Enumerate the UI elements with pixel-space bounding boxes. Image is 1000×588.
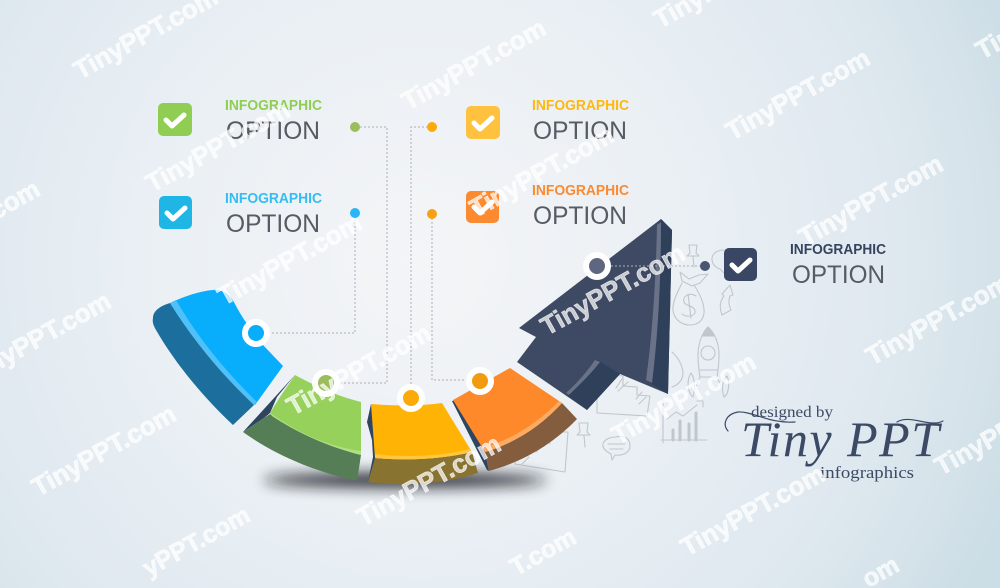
label: option: OPTION <box>226 210 320 238</box>
arrow shaft shade <box>567 360 620 410</box>
yellow dark edge <box>367 404 376 482</box>
designed by: designed by <box>751 404 833 421</box>
option: orange <box>466 183 630 230</box>
doodle: stairs bottom <box>515 432 568 472</box>
watermark: TinyPPT.com <box>140 94 295 198</box>
option: yellow <box>466 98 630 145</box>
dot: blue <box>350 208 360 218</box>
segment: blue <box>153 290 283 425</box>
label: option: OPTION <box>226 117 320 145</box>
connector: yellow <box>411 127 428 386</box>
green side face <box>243 414 361 481</box>
watermark: TinyPPT.com <box>212 207 367 311</box>
watermark: TinyPPT.com <box>281 317 436 421</box>
watermark: TinyPPT.com <box>720 42 875 146</box>
yellow highlight strip <box>375 449 472 459</box>
watermark: TinyPPT.com <box>675 458 830 562</box>
watermark partial: yPPT.com <box>138 501 255 583</box>
dot: orange <box>427 209 437 219</box>
dot: green <box>350 122 360 132</box>
dot: yellow <box>427 122 437 132</box>
infographics: infographics <box>820 463 914 482</box>
label: option: OPTION <box>533 202 627 230</box>
ring: blue <box>245 322 267 344</box>
segment: green <box>243 375 361 481</box>
icon: blue check <box>159 196 192 229</box>
green highlight strip <box>270 413 361 455</box>
connector: navy <box>607 265 700 267</box>
doodle: money bag <box>673 272 708 325</box>
connector: blue <box>268 218 355 333</box>
doodle illustrations <box>515 245 733 472</box>
orange side face <box>485 403 577 471</box>
label: yellow: INFOGRAPHIC <box>532 98 630 114</box>
orange top face <box>453 368 562 452</box>
watermark: TinyPPT.com <box>396 12 551 116</box>
green dark edge <box>243 375 295 432</box>
blue top face <box>170 290 283 405</box>
doodle: speech bubble behind icon <box>712 250 724 273</box>
option: blue <box>159 191 323 238</box>
arrow right side <box>647 219 672 394</box>
label: orange: INFOGRAPHIC <box>532 183 630 199</box>
label: blue: INFOGRAPHIC <box>225 191 323 207</box>
doodle: pin lower <box>577 423 590 447</box>
green top face <box>270 375 361 454</box>
ring: orange <box>469 370 491 392</box>
connector: green <box>337 127 387 383</box>
watermark partial: T.com <box>505 523 581 582</box>
blue side face <box>153 303 254 425</box>
label: navy: INFOGRAPHIC <box>790 242 886 258</box>
label: option: OPTION <box>533 117 627 145</box>
segment: yellow <box>367 403 478 484</box>
ring: yellow <box>400 387 422 409</box>
doodle: bar chart <box>661 400 707 443</box>
label: green: INFOGRAPHIC <box>225 98 323 114</box>
label: option: OPTION <box>792 261 885 289</box>
option: green <box>158 98 323 145</box>
script swashes <box>725 412 943 431</box>
yellow top face <box>371 403 472 459</box>
watermark: TinyPPT.com <box>606 346 761 450</box>
connector lines <box>268 127 700 386</box>
doodle: speech bubble <box>603 436 630 460</box>
icon: navy check <box>724 248 757 281</box>
arrow shaft stripe <box>566 360 600 395</box>
Tiny PPT script: Tiny PPT <box>741 411 942 467</box>
ground shadow <box>263 472 547 488</box>
option: navy <box>724 242 886 289</box>
icon: yellow check <box>466 106 500 139</box>
arrow light stripe <box>646 222 661 383</box>
doodle: stairs top <box>597 375 650 416</box>
doodle: rocket <box>688 327 729 397</box>
watermark: TinyPPT.com <box>351 428 506 532</box>
ring markers <box>245 255 608 409</box>
orange dark edge <box>452 400 489 471</box>
icon: green check <box>158 103 192 136</box>
dot: navy <box>700 261 710 271</box>
blue highlight strip <box>170 300 257 405</box>
arrow head face <box>517 219 672 410</box>
doodle: pin <box>687 245 699 267</box>
watermark: TinyPPT.com <box>464 119 619 223</box>
yellow side face <box>368 452 478 484</box>
brand logo <box>725 404 943 482</box>
doodle: second bag <box>672 352 683 387</box>
watermark: TinyPPT.com <box>535 237 690 341</box>
icon: orange check <box>466 191 499 223</box>
segment: arrow <box>517 219 672 410</box>
orange highlight strip <box>483 401 562 452</box>
doodle: curved arrow <box>720 285 733 315</box>
connector dots <box>350 122 710 271</box>
ring: navy <box>586 255 608 277</box>
segment: orange <box>452 368 577 471</box>
ring: green <box>315 372 337 394</box>
watermark: TinyPPT.com <box>26 398 181 502</box>
watermark: TinyPPT.com <box>793 148 948 252</box>
connector: orange <box>432 218 492 380</box>
